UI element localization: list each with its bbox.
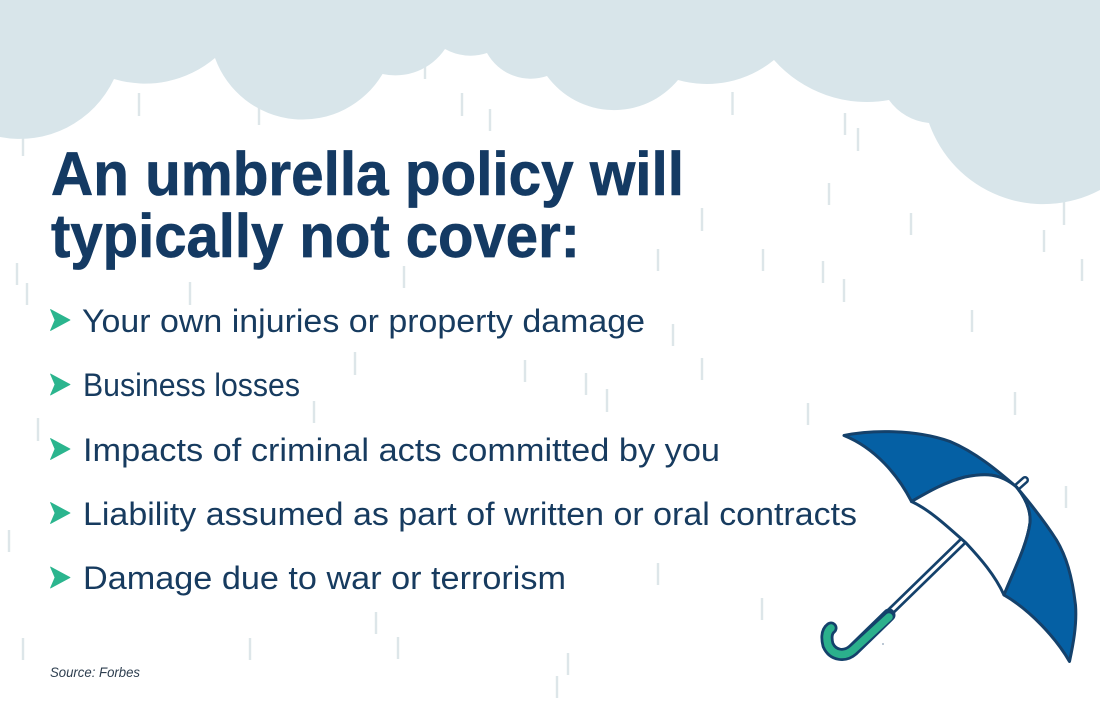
item 5: Damage due to war or terrorism [83, 560, 566, 596]
title: An umbrella policy will [51, 140, 684, 208]
item 3: Impacts of criminal acts committed by you [83, 432, 720, 468]
umbrella handle [827, 615, 889, 654]
speck near handle [882, 643, 884, 645]
umbrella ferrule [1016, 480, 1025, 488]
item 4: Liability assumed as part of written or oral contracts [83, 496, 857, 532]
item 1: Your own injuries or property damage [82, 303, 645, 339]
title [51, 140, 684, 270]
bullet list [50, 303, 857, 596]
umbrella shaft [888, 541, 963, 614]
umbrella canopy: left blue panel [844, 432, 1016, 502]
item 2: Business losses [83, 367, 300, 403]
umbrella canopy: right blue panel [1004, 487, 1076, 662]
umbrella canopy: white centre panel [912, 475, 1030, 595]
source note: Source: Forbes [50, 665, 140, 680]
storm cloud [0, 0, 1100, 204]
title: typically not cover: [51, 202, 580, 270]
icon: umbrella [827, 432, 1076, 662]
